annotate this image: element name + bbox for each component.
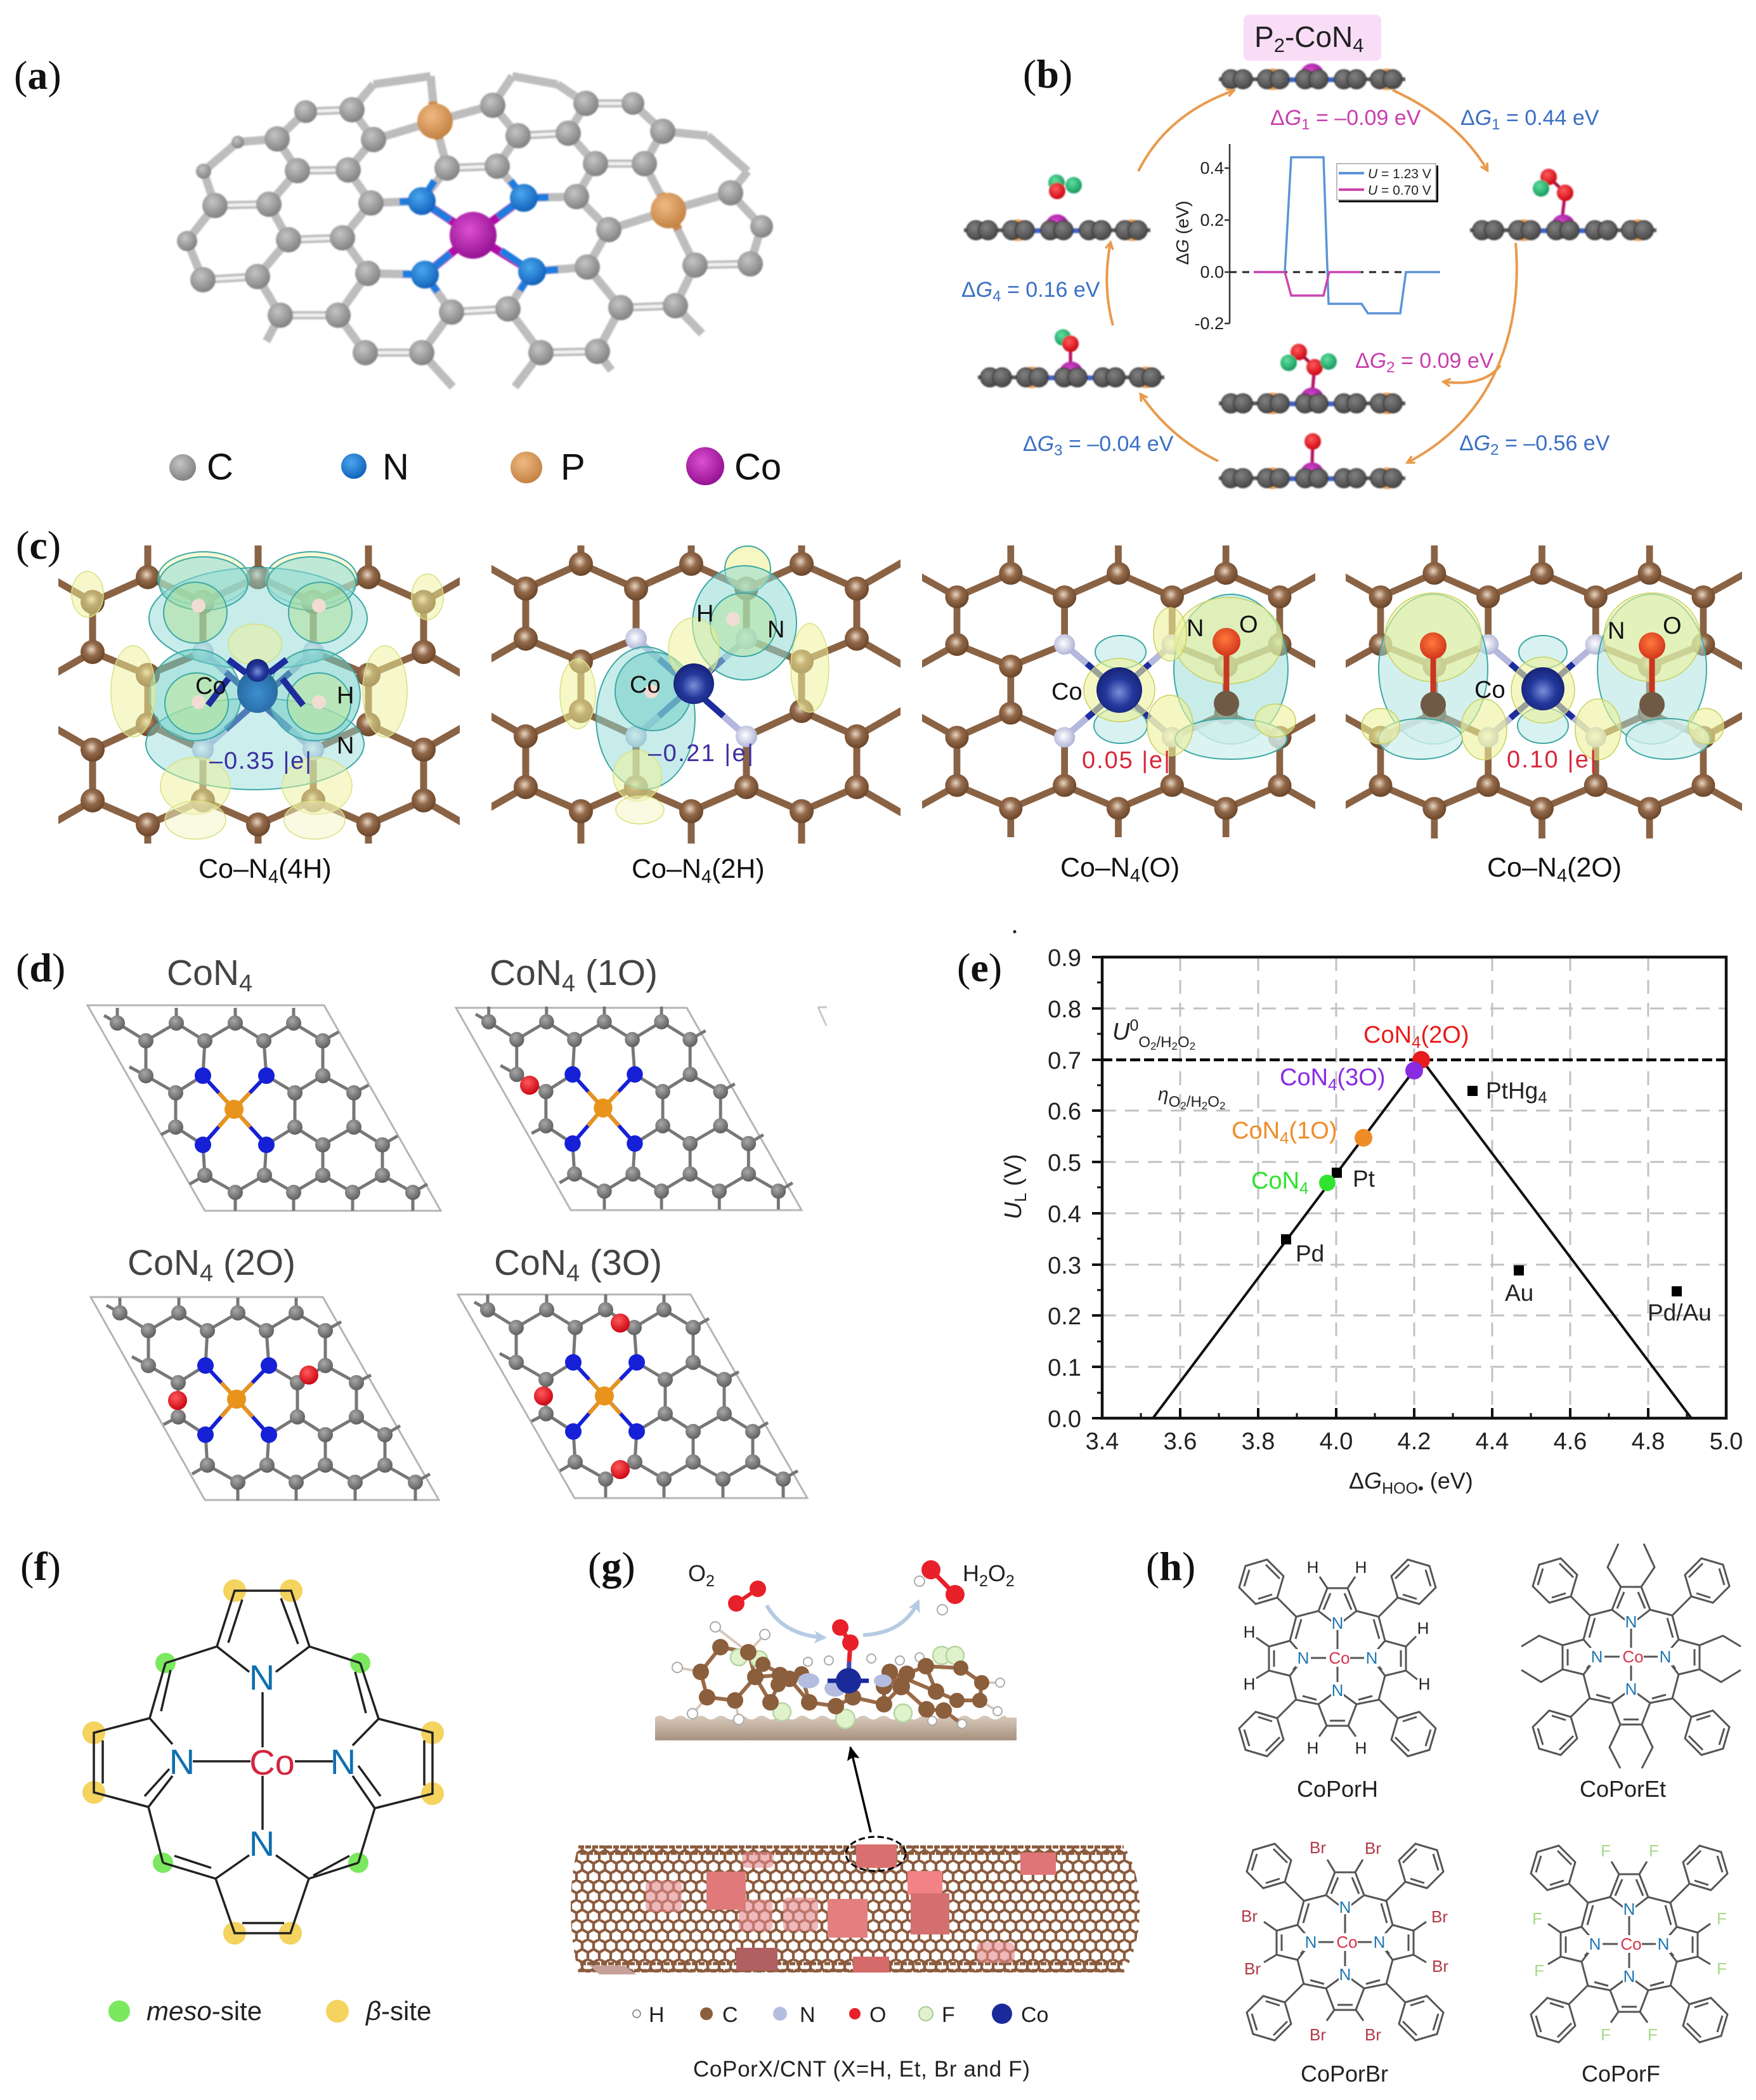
CoN4 data labels: (3O): [1337, 1064, 1385, 1091]
structure CoPorEt: [1521, 1544, 1741, 1768]
structure CoPorH: N: [1332, 1614, 1343, 1633]
chart legend: [1337, 164, 1438, 202]
inset free energy chart: 0.2: [1200, 211, 1224, 230]
inset free energy chart: 0.4: [1200, 159, 1224, 178]
atom symbols: N: [249, 1657, 275, 1697]
titles d: (1O): [575, 953, 658, 993]
legend a: Co: [734, 447, 781, 488]
structure CoPorH: N: [1297, 1648, 1309, 1667]
caption CoPorH: CoPorH: [1297, 1776, 1378, 1802]
CoN4 data points: [1319, 1051, 1430, 1191]
captions c: (O): [1140, 852, 1180, 883]
CoN4 data labels: CoN: [1232, 1118, 1280, 1144]
metal data labels: [1296, 1078, 1712, 1326]
titles d: 4: [566, 1260, 580, 1287]
metal data labels: 4: [1538, 1088, 1547, 1107]
legend g: H: [649, 2003, 665, 2027]
adsorbed molecule: [672, 1619, 1005, 1728]
annotations U0 and eta: O: [1138, 1034, 1150, 1051]
atom symbols: N: [249, 1823, 275, 1863]
axis titles: (V): [1000, 1154, 1027, 1193]
structure Co-N4(2O): N: [1608, 618, 1625, 644]
annotations U0 and eta: /H: [1187, 1093, 1202, 1111]
axis tick labels: 3.4: [1086, 1428, 1119, 1455]
axis tick labels: 4.4: [1476, 1428, 1509, 1455]
annotations U0 and eta: O: [1207, 1093, 1219, 1111]
metal data points: [1281, 1086, 1682, 1296]
panel e: volcano plot: [957, 930, 1743, 1497]
annotations U0 and eta: /H: [1157, 1034, 1172, 1051]
substrate slab: [655, 1716, 1017, 1740]
graphene lattice with Co, N and P atoms: [177, 76, 773, 387]
metal data labels: PtHg: [1486, 1078, 1538, 1104]
titles d: 4: [239, 970, 252, 997]
structure Co-N4(4H): Co: [195, 673, 226, 700]
annotations U0 and eta: 2: [1172, 1040, 1178, 1052]
chart legend: U = 1.23 V: [1368, 167, 1431, 181]
reactant and product labels: H: [963, 1560, 979, 1586]
nanotube: [571, 1844, 1140, 1974]
structure CoPorBr: N: [1339, 1898, 1351, 1917]
cell CoN4: [88, 1005, 441, 1211]
axis titles: U: [1000, 1202, 1027, 1220]
free energy values: 1: [1492, 116, 1500, 133]
axis titles: HOO•: [1382, 1480, 1424, 1497]
structure Co-N4(4H): –0.35 |e|: [209, 748, 311, 774]
free energy values: = –0.04 eV: [1063, 432, 1174, 456]
pink squares: [590, 1844, 1056, 1974]
speckled pink domains: [646, 1852, 1015, 1963]
axis tick labels: 0.3: [1048, 1253, 1081, 1279]
structure CoPorH: Co: [1329, 1648, 1350, 1667]
CoN4 data labels: [1232, 1022, 1469, 1197]
structure CoPorF: N: [1589, 1934, 1601, 1953]
panel g: CoPorX on carbon nanotube: [571, 1544, 1140, 2082]
atom symbols: Co: [249, 1742, 295, 1782]
captions c: 4: [1557, 866, 1567, 886]
panel f: cobalt porphyrin sites: [20, 1544, 444, 2026]
structure CoPorBr: N: [1305, 1933, 1317, 1952]
legend a: P: [561, 447, 585, 488]
structure Co-N4(O): N: [1187, 615, 1204, 642]
structure CoPorF: N: [1658, 1934, 1669, 1953]
title badge P2-CoN4: P: [1254, 20, 1274, 53]
axis tick labels: 4.6: [1554, 1428, 1587, 1455]
atom symbols: N: [169, 1742, 195, 1782]
captions c: 4: [1130, 866, 1140, 886]
title badge P2-CoN4: [1244, 15, 1381, 61]
cycle arrows: [1107, 90, 1517, 462]
cell CoN4 (1O): [456, 1007, 802, 1210]
structure CoPorF: N: [1623, 1967, 1635, 1986]
annotations U0 and eta: U: [1112, 1019, 1129, 1045]
annotations U0 and eta: 2: [1202, 1100, 1207, 1112]
atom symbols: N: [330, 1742, 356, 1782]
structure CoPorBr: Co: [1336, 1933, 1358, 1952]
plot grid: [1102, 957, 1726, 1418]
reference potential dashed line: [1102, 1059, 1726, 1061]
atom symbols: [169, 1657, 356, 1863]
title badge P2-CoN4: 2: [1274, 34, 1285, 56]
label c: (c): [16, 523, 61, 568]
chart legend: U = 0.70 V: [1368, 183, 1431, 198]
structure Co-N4(2H): [491, 545, 901, 844]
structure Co-N4(2O): 0.10 |e|: [1507, 747, 1596, 773]
annotations U0 and eta: O: [1169, 1093, 1180, 1111]
CoN4 data labels: CoN: [1280, 1064, 1328, 1091]
structure CoPorEt: N: [1625, 1679, 1637, 1699]
structure CoPorF: [1531, 1841, 1727, 2044]
structure CoPorBr: [1241, 1838, 1448, 2044]
axis titles: [1000, 1154, 1473, 1497]
axis titles: ΔG: [1349, 1468, 1382, 1494]
free energy values: ΔG: [1023, 432, 1054, 456]
structure CoPorF: F: [1648, 2025, 1658, 2044]
structure Co-N4(4H): [58, 545, 460, 844]
title badge P2-CoN4: 4: [1353, 34, 1364, 56]
light blue reaction arrows: [767, 1601, 918, 1638]
legend f: meso-site: [146, 1996, 262, 2026]
inset free energy chart: [1173, 144, 1444, 333]
axis tick labels: 0.9: [1048, 945, 1081, 972]
CoN4 data labels: CoN: [1363, 1022, 1412, 1048]
free energy values: ΔG: [1270, 106, 1301, 130]
axis tick labels: 0.6: [1048, 1099, 1081, 1125]
structure Co-N4(O): [922, 545, 1315, 837]
axis tick labels: 0.2: [1048, 1303, 1081, 1330]
label d: (d): [16, 945, 65, 990]
cell CoN4 (3O): [458, 1295, 807, 1498]
structure CoPorF: F: [1649, 1841, 1659, 1860]
structure CoPorBr: N: [1374, 1933, 1385, 1952]
structure CoPorH: N: [1332, 1681, 1343, 1700]
reactant and product labels: 2: [1006, 1572, 1015, 1590]
free energy values: ΔG: [1459, 431, 1490, 455]
reactant and product labels: 2: [706, 1572, 715, 1590]
CoN4 data labels: 4: [1299, 1178, 1309, 1197]
free energy values: [961, 106, 1610, 459]
CoN4 data labels: 4: [1280, 1128, 1289, 1147]
reactant and product labels: O: [688, 1560, 706, 1586]
titles d: (3O): [580, 1242, 662, 1283]
structure CoPorH: H: [1244, 1674, 1255, 1693]
captions c: 4: [268, 867, 278, 887]
volcano lines: [1153, 1060, 1691, 1418]
structure CoPorH: H: [1307, 1738, 1318, 1758]
structure Co-N4(2H): N: [767, 616, 784, 643]
annotations U0 and eta: O: [1178, 1034, 1190, 1051]
axis tick labels: 0.7: [1048, 1048, 1081, 1074]
CoN4 data labels: (2O): [1421, 1022, 1469, 1048]
structure CoPorH: [1239, 1558, 1436, 1758]
captions c: Co–N: [1487, 852, 1557, 883]
structure Co-N4(2O): O: [1663, 613, 1682, 639]
free energy values: 1: [1301, 116, 1310, 133]
structure Co-N4(4H): H: [337, 682, 354, 709]
legend g: O: [869, 2003, 886, 2027]
structure Co-N4(2H): –0.21 |e|: [648, 740, 753, 767]
panel d: CoN4 unit cells: [16, 945, 827, 1501]
side-view sheets with adsorbates: [964, 63, 1656, 489]
annotations U0 and eta: 0: [1129, 1017, 1138, 1034]
structure CoPorBr: Br: [1310, 2025, 1326, 2044]
metal data labels: Pd: [1296, 1241, 1324, 1267]
free energy values: 4: [992, 288, 1001, 305]
metal data labels: Au: [1505, 1280, 1533, 1306]
annotations U0 and eta: [1112, 1017, 1225, 1112]
structure CoPorH: H: [1355, 1738, 1367, 1758]
titles d: 4: [200, 1260, 213, 1287]
structure CoPorF: N: [1623, 1900, 1635, 1919]
caption CoPorF: CoPorF: [1582, 2061, 1660, 2087]
structure CoPorF: Co: [1620, 1934, 1642, 1953]
panel a: P2-CoN4 top view: [14, 53, 781, 488]
caption CoPorEt: CoPorEt: [1580, 1776, 1666, 1802]
axis tick labels: 0.4: [1048, 1201, 1081, 1228]
structure Co-N4(4H): N: [337, 733, 354, 759]
structure Co-N4(2O): [1331, 525, 1753, 856]
panel c: charge density differences: [16, 513, 1753, 887]
annotations U0 and eta: 2: [1150, 1040, 1157, 1052]
free energy values: ΔG: [1355, 349, 1386, 373]
legend f: β-site: [365, 1996, 431, 2026]
free energy values: = –0.56 eV: [1499, 431, 1610, 455]
legend f: [108, 1996, 431, 2026]
captions c: (2O): [1567, 852, 1622, 883]
caption CoPorBr: CoPorBr: [1301, 2061, 1388, 2087]
legend g: Co: [1021, 2003, 1048, 2027]
CoN4 data labels: 4: [1328, 1075, 1337, 1094]
structure CoPorEt: N: [1591, 1647, 1603, 1666]
axis tick labels: 4.8: [1632, 1428, 1665, 1455]
reactant and product labels: 2: [979, 1572, 988, 1590]
free energy values: = 0.16 eV: [1001, 278, 1100, 302]
axis tick labels: 0.1: [1048, 1355, 1081, 1381]
structure CoPorBr: N: [1339, 1965, 1351, 1984]
legend g: C: [722, 2003, 738, 2027]
dashed selection ellipse: [846, 1837, 906, 1871]
structure Co-N4(2O): Co: [1474, 677, 1506, 703]
axis tick labels: 3.8: [1242, 1428, 1275, 1455]
axis tick labels: 4.0: [1320, 1428, 1353, 1455]
structure CoPorH: H: [1417, 1619, 1429, 1638]
free energy values: 2: [1490, 441, 1499, 459]
inset free energy chart: ΔG (eV): [1173, 200, 1192, 265]
label h: (h): [1146, 1544, 1195, 1589]
caption g: CoPorX/CNT (X=H, Et, Br and F): [693, 2057, 1030, 2082]
captions c: Co–N: [198, 854, 268, 884]
structure CoPorEt: N: [1625, 1612, 1637, 1631]
metal data labels: Pd/Au: [1648, 1300, 1712, 1326]
free energy values: = 0.44 eV: [1500, 106, 1599, 130]
label a: (a): [14, 53, 62, 98]
structure Co-N4(O): O: [1239, 611, 1258, 638]
axis titles: (eV): [1424, 1468, 1473, 1494]
titles d: 4: [562, 970, 575, 997]
CoN4 data labels: 4: [1412, 1033, 1421, 1052]
titles d: CoN: [490, 953, 562, 993]
structure CoPorBr: Br: [1432, 1957, 1448, 1976]
site markers: [82, 1579, 444, 1945]
axis tick labels: [1048, 945, 1743, 1455]
captions c: (2H): [712, 854, 765, 884]
titles d: [127, 953, 662, 1287]
structure Co-N4(2H): H: [696, 601, 713, 627]
zoom arrow: [850, 1747, 871, 1832]
label b: (b): [1023, 51, 1072, 96]
axis tick labels: 4.2: [1398, 1428, 1431, 1455]
titles d: CoN: [494, 1242, 566, 1283]
structure CoPorBr: Br: [1431, 1907, 1448, 1926]
legend g: F: [942, 2003, 955, 2027]
captions c: Co–N: [1060, 852, 1130, 883]
legend a: [169, 447, 781, 488]
axis tick labels: 5.0: [1710, 1428, 1743, 1455]
O2 and H2O2 molecules: [728, 1560, 965, 1615]
label e: (e): [957, 945, 1002, 990]
free energy values: ΔG: [1460, 106, 1492, 130]
CoN4 data labels: CoN: [1251, 1168, 1299, 1194]
structure CoPorF: F: [1534, 1961, 1544, 1980]
porphyrin skeleton: [94, 1591, 432, 1933]
legend g: N: [800, 2003, 816, 2027]
structure CoPorF: F: [1601, 1841, 1611, 1860]
structure CoPorH: H: [1419, 1674, 1430, 1693]
legend a: C: [207, 447, 233, 488]
label g: (g): [588, 1544, 635, 1589]
inset free energy chart: -0.2: [1194, 314, 1224, 333]
structure CoPorBr: Br: [1244, 1959, 1261, 1978]
legend a: N: [382, 447, 409, 488]
captions c: [198, 852, 1622, 887]
structure CoPorF: F: [1717, 1909, 1727, 1928]
structure CoPorBr: Br: [1241, 1907, 1258, 1926]
plot axes and ticks: [1092, 957, 1726, 1418]
axis tick labels: 0.0: [1048, 1406, 1081, 1433]
axis tick labels: 0.5: [1048, 1150, 1081, 1177]
structure Co-N4(O): 0.05 |e|: [1082, 747, 1170, 774]
titles d: CoN: [167, 953, 239, 993]
inset free energy chart: 0.0: [1200, 263, 1224, 282]
panel h: porphyrin structures: [1146, 1544, 1741, 2087]
title badge P2-CoN4: -CoN: [1285, 20, 1353, 53]
structure CoPorBr: Br: [1365, 2025, 1381, 2044]
free energy values: ΔG: [961, 278, 992, 302]
structure CoPorF: F: [1532, 1909, 1542, 1928]
structure CoPorF: F: [1717, 1959, 1727, 1978]
free energy values: 3: [1054, 442, 1063, 459]
structure CoPorH: N: [1366, 1648, 1377, 1667]
axis titles: L: [1011, 1193, 1030, 1202]
structure CoPorBr: Br: [1310, 1838, 1326, 1857]
free energy values: = –0.09 eV: [1310, 106, 1421, 130]
titles d: (2O): [213, 1242, 296, 1283]
structure Co-N4(2H): Co: [630, 672, 661, 698]
CoN4 data labels: (1O): [1289, 1118, 1337, 1144]
reactant and product labels: O: [988, 1560, 1006, 1586]
axis tick labels: 3.6: [1164, 1428, 1197, 1455]
structure CoPorF: F: [1601, 2025, 1611, 2044]
annotations U0 and eta: η: [1158, 1084, 1169, 1105]
panel b: reaction cycle: [961, 15, 1656, 489]
structure CoPorH: H: [1244, 1622, 1255, 1641]
structure CoPorEt: Co: [1622, 1647, 1644, 1666]
structure CoPorH: H: [1307, 1558, 1318, 1577]
captions c: Co–N: [632, 854, 701, 884]
titles d: CoN: [127, 1242, 200, 1283]
legend g: [633, 2003, 1048, 2027]
structure CoPorEt: N: [1660, 1647, 1671, 1666]
free energy values: = 0.09 eV: [1395, 349, 1494, 373]
metal data labels: Pt: [1353, 1166, 1376, 1192]
structure CoPorH: H: [1355, 1558, 1367, 1577]
annotations U0 and eta: 2: [1180, 1100, 1187, 1112]
label f: (f): [20, 1544, 61, 1589]
structure CoPorBr: Br: [1365, 1839, 1381, 1858]
captions c: 4: [701, 867, 712, 887]
reactant and product labels: [688, 1560, 1015, 1590]
captions c: (4H): [278, 854, 332, 884]
annotations U0 and eta: 2: [1190, 1040, 1195, 1052]
axis tick labels: 0.8: [1048, 996, 1081, 1023]
cell CoN4 (2O): [91, 1297, 439, 1501]
structure Co-N4(O): Co: [1051, 679, 1083, 705]
annotations U0 and eta: 2: [1219, 1100, 1225, 1112]
free energy values: 2: [1386, 359, 1395, 376]
